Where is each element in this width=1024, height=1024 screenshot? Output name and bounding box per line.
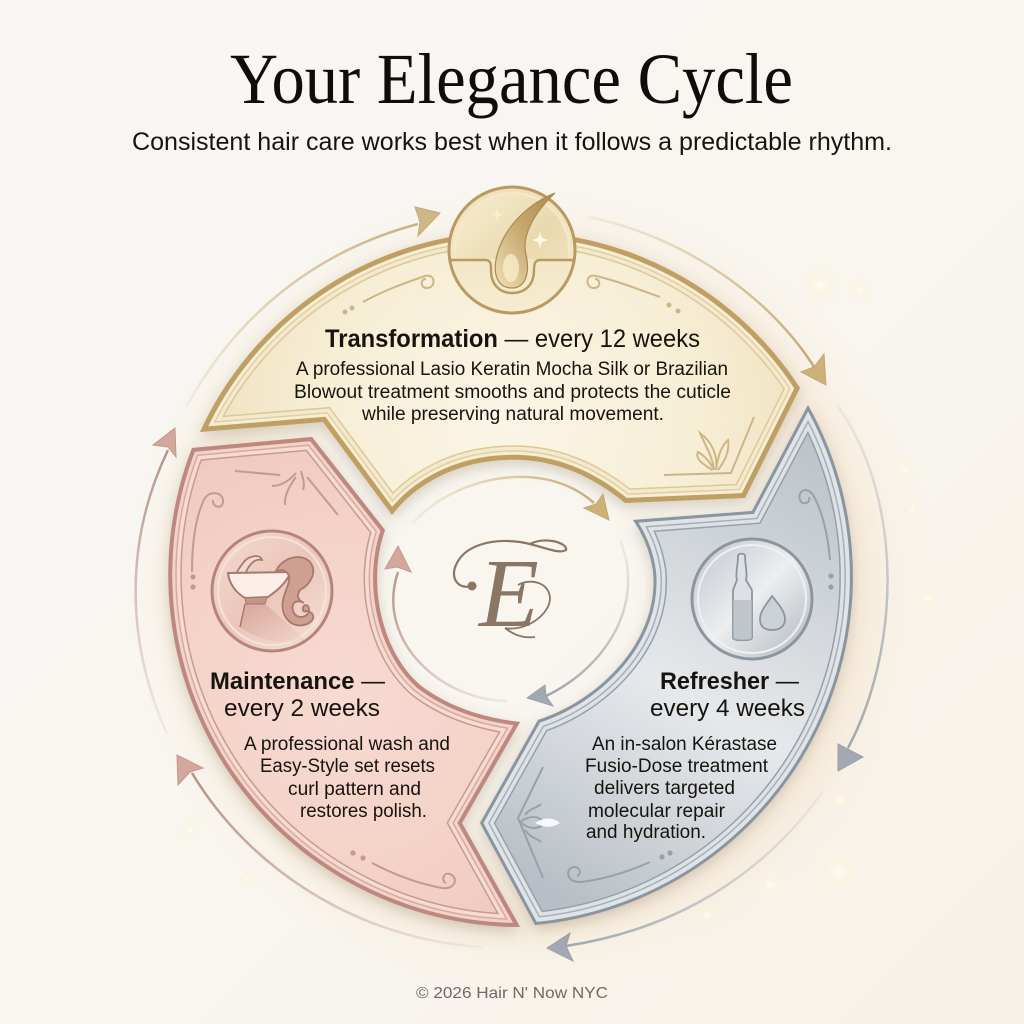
heading: refresher: every 4 weeks bbox=[650, 695, 805, 722]
body text: maintenance: restores polish. bbox=[300, 801, 427, 822]
heading: transformation: Transformation — every 12 weeks bbox=[325, 325, 700, 353]
icon: ampoule and droplet bbox=[692, 539, 812, 659]
arrow: outer rose left bbox=[136, 428, 176, 734]
monogram E bbox=[454, 540, 566, 648]
background sparkles bbox=[178, 261, 944, 927]
arrow: inner gold bbox=[413, 477, 609, 523]
rose segment shape bbox=[168, 437, 520, 927]
arrow: outer gold right bbox=[588, 217, 826, 385]
body text: maintenance: Easy-Style set resets bbox=[260, 756, 435, 777]
body text: refresher bbox=[585, 734, 777, 843]
body text: refresher: and hydration. bbox=[586, 822, 706, 843]
body text: transformation: A professional Lasio Keratin Mocha Silk or Brazilian bbox=[296, 359, 728, 380]
arrow: outer rose bottom bbox=[177, 755, 483, 947]
monogram E: E bbox=[477, 540, 539, 648]
panel: transformation bbox=[200, 187, 800, 515]
rose ornaments bbox=[191, 471, 455, 888]
subtitle: Consistent hair care works best when it follows a predictable rhythm. bbox=[132, 128, 892, 156]
heading: maintenance: every 2 weeks bbox=[224, 695, 380, 722]
body text: refresher: An in-salon Kérastase bbox=[592, 734, 777, 755]
panel: refresher bbox=[480, 405, 853, 925]
arrow: outer gold left bbox=[186, 207, 440, 407]
arrow: inner rose bbox=[385, 546, 507, 701]
body text: refresher: delivers targeted bbox=[594, 778, 735, 799]
heading: maintenance bbox=[210, 668, 385, 722]
body text: refresher: Fusio-Dose treatment bbox=[585, 756, 769, 777]
heading: refresher bbox=[650, 668, 805, 722]
panel: maintenance bbox=[168, 437, 520, 927]
arrow: outer silver bottom bbox=[547, 791, 823, 961]
arrow: outer silver right bbox=[837, 405, 888, 771]
body text: refresher: molecular repair bbox=[588, 801, 726, 822]
body text: maintenance bbox=[244, 734, 450, 822]
body text: transformation bbox=[294, 359, 731, 425]
body text: transformation: while preserving natural movement. bbox=[361, 404, 664, 425]
footer: © 2026 Hair N' Now NYC bbox=[416, 985, 608, 1002]
silver segment shape bbox=[480, 405, 853, 925]
gold ornaments bbox=[344, 276, 754, 475]
body text: maintenance: A professional wash and bbox=[244, 734, 450, 755]
silver ornaments bbox=[518, 490, 833, 882]
heading: refresher: Refresher — bbox=[660, 668, 799, 695]
gold segment shape bbox=[200, 231, 800, 515]
body text: maintenance: curl pattern and bbox=[288, 779, 421, 800]
title: Your Elegance Cycle bbox=[230, 39, 793, 119]
body text: transformation: Blowout treatment smooths and protects the cuticle bbox=[294, 382, 731, 403]
heading: maintenance: Maintenance — bbox=[210, 668, 385, 695]
warm halo behind the wheel bbox=[120, 180, 940, 1000]
icon: hair follicle bbox=[449, 187, 575, 313]
arrow: inner silver bbox=[527, 540, 628, 706]
icon: wash basin and curl bbox=[212, 531, 332, 651]
